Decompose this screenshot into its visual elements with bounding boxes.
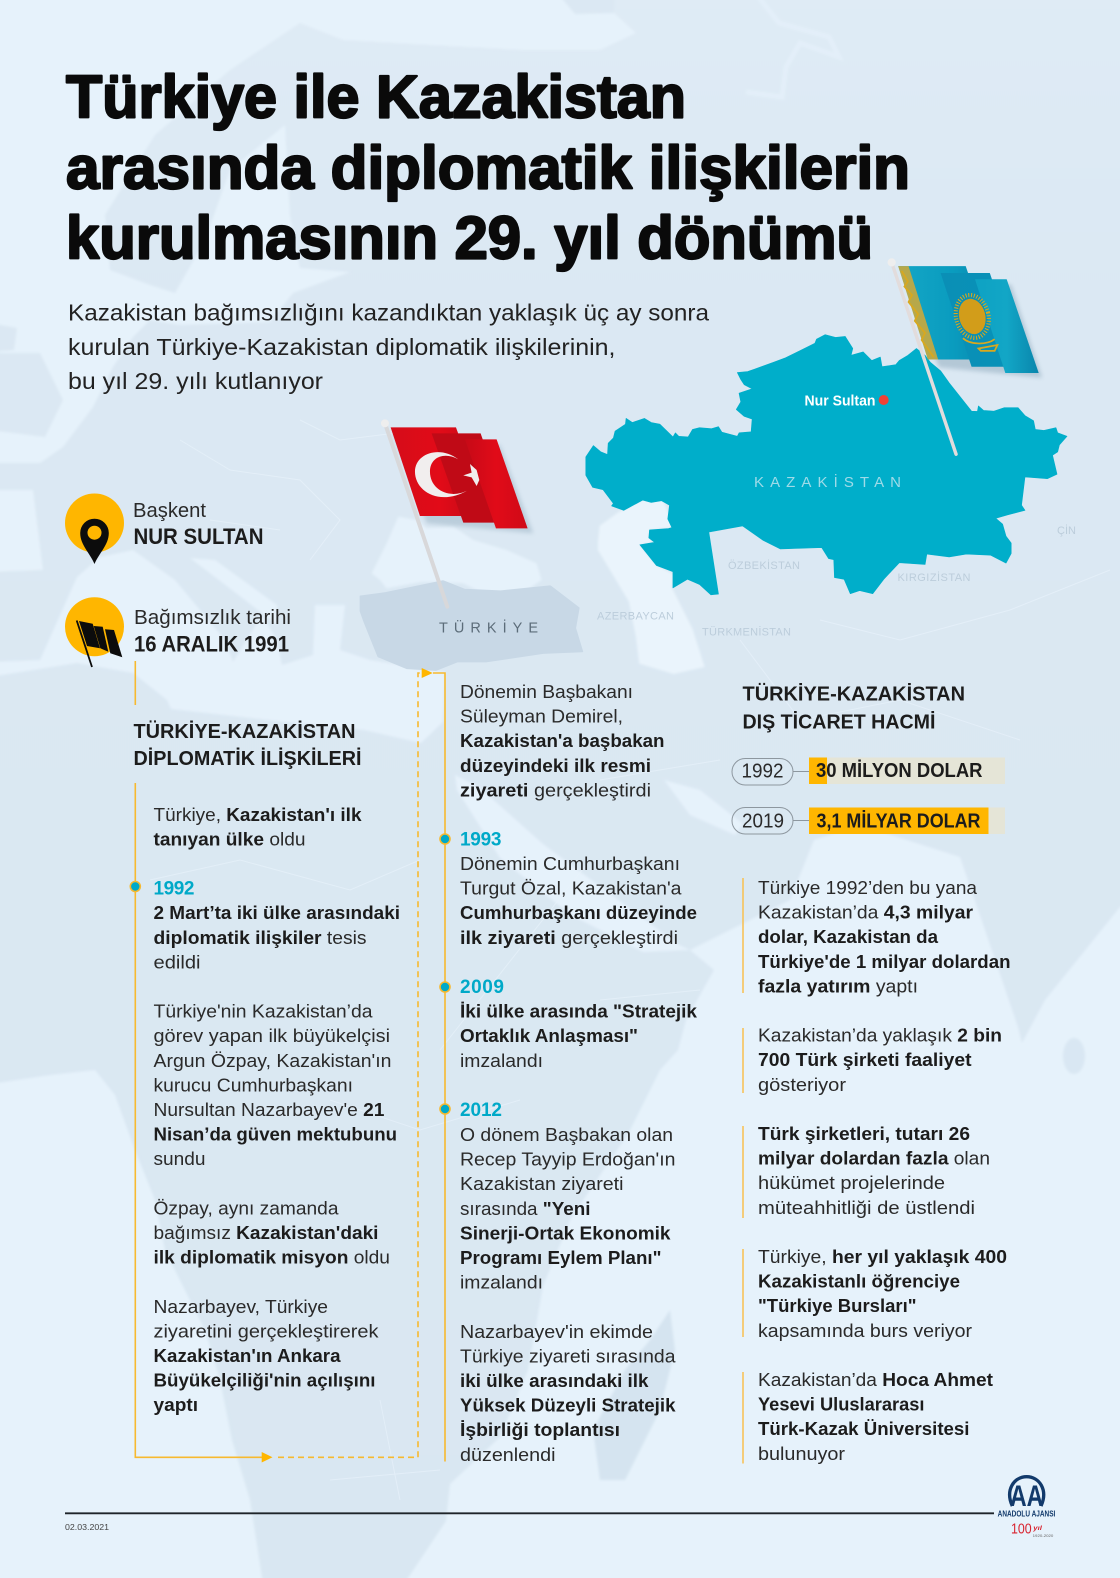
title: arasında diplomatik ilişkilerin (66, 134, 910, 202)
text column: timeline part 2: İki ülke arasında "Stratejik (460, 1002, 698, 1022)
text column: timeline part 1: Kazakistan'ın Ankara (154, 1346, 342, 1366)
text column: timeline part 2: imzalandı (460, 1273, 543, 1293)
info: capital: NUR SULTAN (134, 524, 264, 549)
heading: foreign trade (742, 682, 965, 733)
text column: timeline part 2: Dönemin Cumhurbaşkanı (460, 854, 680, 874)
subtitle: kurulan Türkiye-Kazakistan diplomatik ilişkilerinin, (68, 334, 616, 360)
text column: timeline part 1: 2 Mart’ta iki ülke arasındaki (154, 903, 400, 923)
text column: timeline part 1: sundu (154, 1149, 206, 1169)
info: capital (65, 494, 264, 564)
text column: facts: "Türkiye Bursları" (758, 1296, 916, 1316)
flag: Kazakistan (888, 258, 1042, 454)
logo: Anadolu Ajansı: 1920-2020 (1033, 1534, 1053, 1538)
bar: 2019 (732, 808, 1005, 834)
text column: timeline part 2: O dönem Başbakan olan (460, 1125, 673, 1145)
text column: timeline part 1: Türkiye'nin Kazakistan’da (154, 1002, 374, 1022)
text column: facts: Türkiye'de 1 milyar dolardan (758, 952, 1010, 972)
text column: timeline part 1: bağımsız Kazakistan'daki (154, 1223, 378, 1243)
text column: timeline part 2: Süleyman Demirel, (460, 707, 623, 727)
map labels: KIRGIZİSTAN (898, 571, 971, 584)
text column: facts: müteahhitliği de üstlendi (758, 1198, 975, 1218)
bar: 2019: 2019 (742, 810, 784, 832)
text column: timeline part 1: ziyaretini gerçekleştirerek (154, 1321, 380, 1341)
info: capital: Başkent (133, 500, 206, 522)
sea: Caspian (598, 500, 705, 674)
text column: facts: fazla yatırım yaptı (758, 976, 918, 996)
subtitle: bu yıl 29. yılı kutlanıyor (68, 368, 323, 394)
text column: timeline part 2: Turgut Özal, Kazakistan'a (460, 879, 683, 899)
text column: facts: hükümet projelerinde (758, 1173, 945, 1193)
text column: facts: Kazakistan’da 4,3 milyar (758, 903, 973, 923)
sea: Red Sea, Gulf (455, 775, 690, 952)
map labels: TÜRKİYE (439, 618, 538, 636)
text column: facts: Türk-Kazak Üniversitesi (758, 1419, 970, 1439)
text column: timeline part 2: Nazarbayev'in ekimde (460, 1322, 653, 1342)
text column: timeline part 1: Nazarbayev, Türkiye (154, 1297, 328, 1317)
text column: timeline part 2: Programı Eylem Planı" (460, 1248, 662, 1268)
text column: facts: Kazakistanlı öğrenciye (758, 1272, 960, 1292)
map labels: Nur Sultan (804, 394, 876, 410)
text column: timeline part 2: Kazakistan ziyareti (460, 1174, 624, 1194)
text column: timeline part 1: diplomatik ilişkiler tesis (154, 928, 366, 948)
subtitle (68, 300, 709, 394)
text column: facts: bulunuyor (758, 1444, 845, 1464)
bar: 1992: 30 MİLYON DOLAR (816, 759, 983, 782)
heading: foreign trade: TÜRKİYE-KAZAKİSTAN (742, 682, 965, 706)
text column: timeline part 2: Yüksek Düzeyli Stratejik (460, 1396, 677, 1416)
heading: diplomatic relations (134, 720, 362, 770)
text column: facts: Türkiye, her yıl yaklaşık 400 (758, 1247, 1007, 1267)
map labels: KAZAKİSTAN (754, 473, 901, 491)
text column: timeline part 1: Nisan’da güven mektubunu (154, 1125, 397, 1145)
text column: timeline part 1: Türkiye, Kazakistan'ı ilk (154, 805, 363, 825)
heading: diplomatic relations: DİPLOMATİK İLİŞKİLERİ (134, 747, 362, 770)
text column: timeline part 1: görev yapan ilk büyükelçisi (154, 1026, 390, 1046)
text column: timeline part 2: 1993 (460, 829, 502, 850)
info: independence date (65, 597, 291, 667)
info: independence date: Bağımsızlık tarihi (134, 607, 291, 629)
text column: facts: 700 Türk şirketi faaliyet (758, 1050, 972, 1070)
text column: timeline part 2: Recep Tayyip Erdoğan'ın (460, 1150, 676, 1170)
map labels: ÖZBEKİSTAN (728, 559, 800, 572)
text column: facts: milyar dolardan fazla olan (758, 1149, 990, 1169)
logo: Anadolu Ajansı: ANADOLU AJANSI (998, 1510, 1055, 1519)
icon: location pin (65, 494, 124, 564)
sea: Mediterranean (0, 550, 445, 743)
text column: timeline part 2: Kazakistan'a başbakan (460, 731, 664, 751)
text column: facts: Kazakistan’da Hoca Ahmet (758, 1370, 993, 1390)
bar: 1992 (732, 758, 1005, 785)
footer rule and date: 02.03.2021 (65, 1522, 109, 1532)
text column: timeline part 2: düzeyindeki ilk resmi (460, 756, 651, 776)
text column: facts: dolar, Kazakistan da (758, 927, 939, 947)
bar: 1992: 1992 (742, 760, 784, 782)
text column: facts: Kazakistan’da yaklaşık 2 bin (758, 1026, 1002, 1046)
text column: timeline part 1: 1992 (154, 878, 194, 900)
text column: timeline part 2: iki ülke arasındaki ilk (460, 1371, 650, 1391)
title (66, 64, 910, 272)
subtitle: Kazakistan bağımsızlığını kazandıktan yaklaşık üç ay sonra (68, 300, 709, 326)
text column: timeline part 1: Argun Özpay, Kazakistan'ın (154, 1051, 392, 1071)
map labels: TÜRKMENİSTAN (702, 626, 791, 638)
text column: timeline part 1: edildi (154, 952, 200, 972)
map: Kazakistan (586, 335, 1067, 595)
text column: timeline part 2: Cumhurbaşkanı düzeyinde (460, 903, 697, 923)
text column: timeline part 1: Nursultan Nazarbayev'e 21 (154, 1100, 384, 1120)
text column: timeline part 2 (460, 682, 698, 1465)
text column: facts (743, 878, 1010, 1464)
text column: facts: Yesevi Uluslararası (758, 1395, 924, 1415)
text column: facts: kapsamında burs veriyor (758, 1321, 972, 1341)
bar: 2019: 3,1 MİLYAR DOLAR (816, 810, 981, 832)
heading: foreign trade: DIŞ TİCARET HACMİ (742, 710, 936, 733)
icon: flag (65, 597, 124, 667)
sea: Black Sea (372, 517, 542, 597)
logo: Anadolu Ajansı: yıl (1032, 1526, 1042, 1532)
title: kurulmasının 29. yıl dönümü (66, 204, 873, 272)
flag: Türkiye (381, 419, 533, 607)
text column: facts: gösteriyor (758, 1075, 846, 1095)
text column: facts: Türkiye 1992’den bu yana (758, 878, 978, 898)
info: independence date: 16 ARALIK 1991 (134, 632, 289, 656)
title: Türkiye ile Kazakistan (66, 64, 686, 130)
text column: timeline part 1: Özpay, aynı zamanda (154, 1198, 340, 1218)
text column: timeline part 2: ilk ziyareti gerçekleştirdi (460, 928, 678, 948)
map labels: ÇİN (1057, 524, 1076, 537)
logo: Anadolu Ajansı: AA (1010, 1480, 1043, 1513)
text column: facts: Türk şirketleri, tutarı 26 (758, 1124, 970, 1144)
timeline connector lines (130, 661, 450, 1462)
text column: timeline part 2: sırasında "Yeni (460, 1199, 590, 1219)
text column: timeline part 2: imzalandı (460, 1051, 543, 1071)
text column: timeline part 2: İşbirliği toplantısı (460, 1420, 620, 1440)
map labels: AZERBAYCAN (597, 610, 674, 622)
text column: timeline part 2: ziyareti gerçekleştirdi (460, 780, 651, 800)
text column: timeline part 1: yaptı (154, 1395, 198, 1415)
text column: timeline part 1: Büyükelçiliği'nin açılışını (154, 1371, 376, 1391)
text column: timeline part 1 (154, 805, 400, 1415)
bar chart: foreign trade volume (732, 758, 1005, 834)
text column: timeline part 1: kurucu Cumhurbaşkanı (154, 1075, 353, 1095)
text column: timeline part 2: 2012 (460, 1100, 502, 1121)
text column: timeline part 2: Türkiye ziyareti sırasında (460, 1346, 677, 1366)
text column: timeline part 1: tanıyan ülke oldu (154, 830, 306, 850)
text column: timeline part 2: Dönemin Başbakanı (460, 682, 633, 702)
text column: timeline part 2: Ortaklık Anlaşması" (460, 1026, 638, 1046)
text column: timeline part 2: Sinerji-Ortak Ekonomik (460, 1223, 672, 1243)
logo: Anadolu Ajansı: 100 (1011, 1521, 1032, 1537)
text column: timeline part 1: ilk diplomatik misyon oldu (154, 1248, 390, 1268)
logo: Anadolu Ajansı (998, 1477, 1055, 1538)
map labels (439, 394, 1076, 638)
map: Türkiye (361, 581, 582, 670)
heading: diplomatic relations: TÜRKİYE-KAZAKİSTAN (134, 720, 356, 743)
text column: timeline part 2: düzenlendi (460, 1445, 556, 1465)
text column: timeline part 2: 2009 (460, 977, 504, 998)
